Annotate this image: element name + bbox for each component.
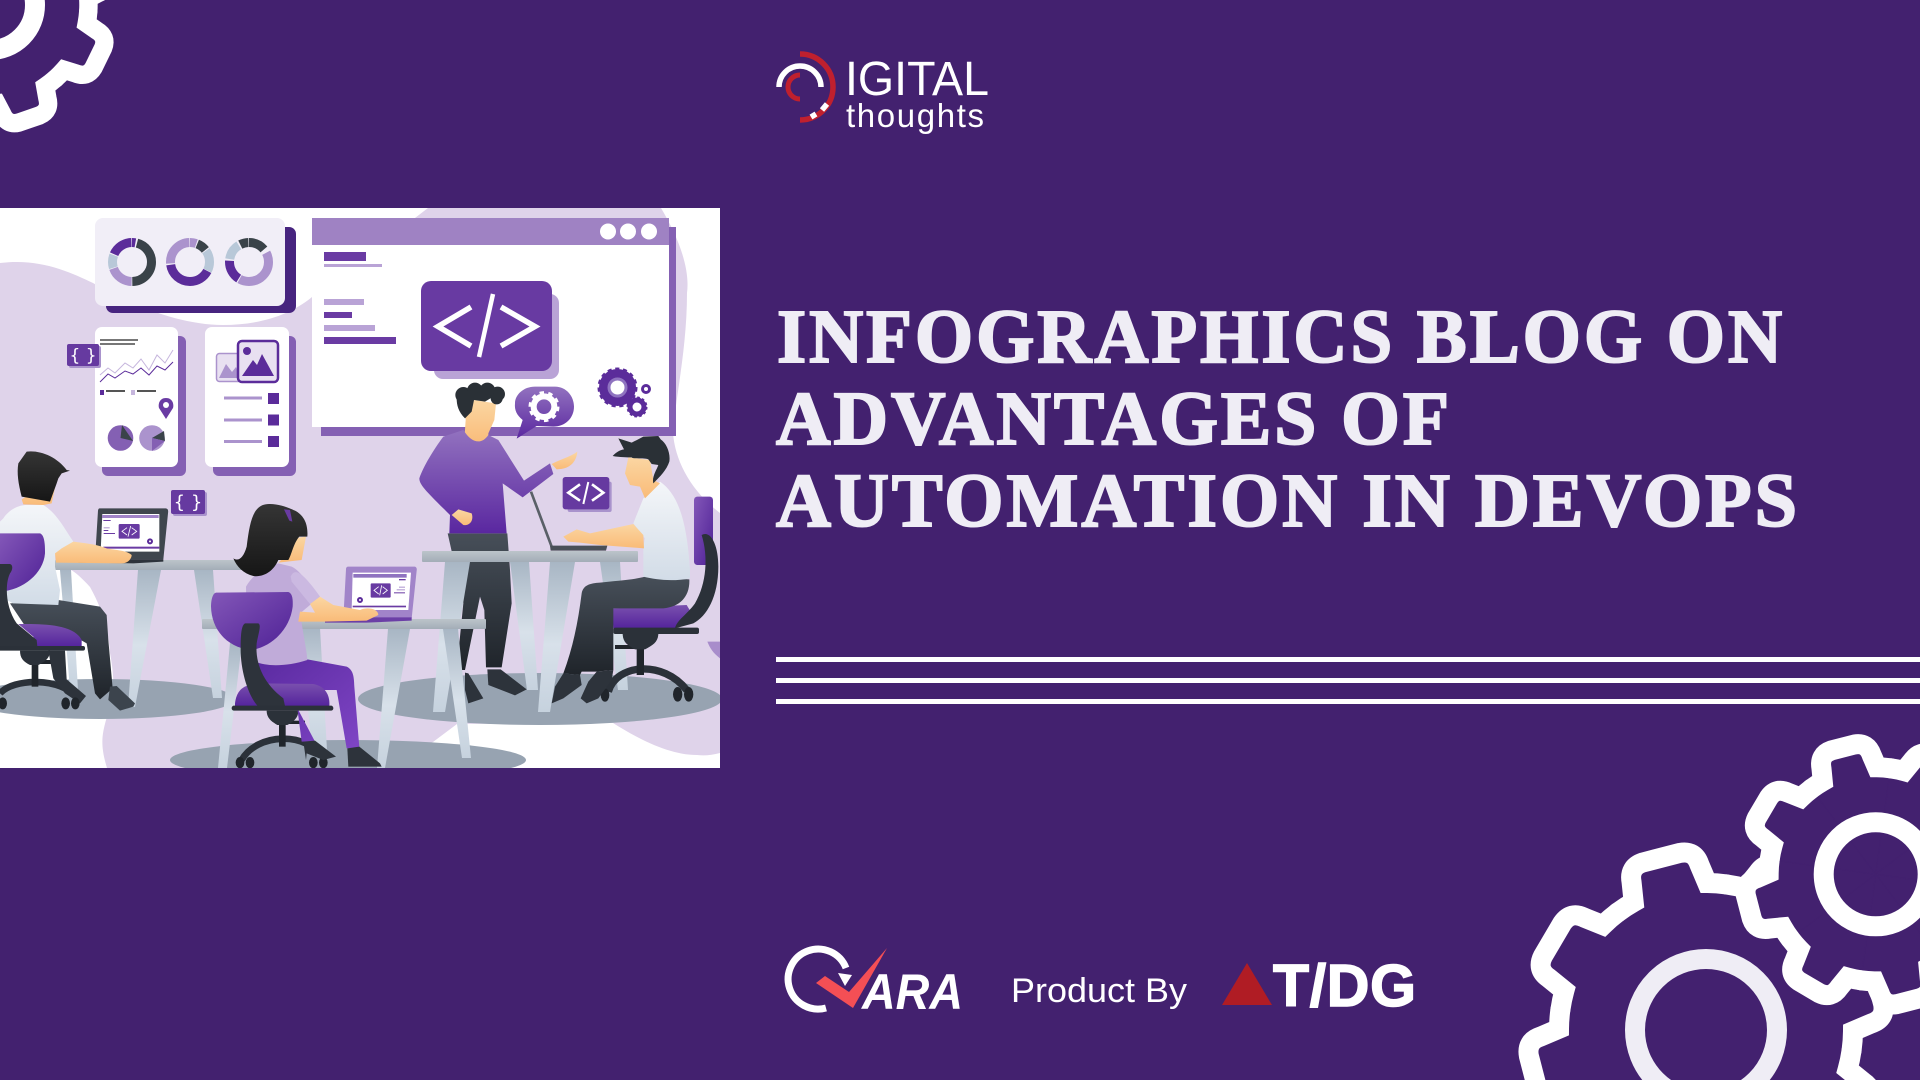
text: Product By: Product By	[1011, 972, 1187, 1010]
title: ADVANTAGES OF	[776, 377, 1452, 461]
logo: Digital Thoughts: thoughts	[846, 97, 984, 134]
pants	[10, 600, 113, 699]
laptop	[78, 508, 168, 563]
table: left desk	[55, 560, 245, 707]
person: seated woman	[211, 504, 417, 768]
laptop	[531, 492, 552, 547]
chair back	[211, 592, 293, 650]
icon: code tag badge right	[563, 477, 612, 512]
hair	[613, 436, 670, 483]
icon: code tag	[421, 281, 559, 379]
icon: curly braces badge centre	[171, 490, 207, 516]
chair	[601, 497, 713, 702]
panel: browser window with code	[312, 218, 676, 436]
person: standing man	[419, 383, 577, 703]
logo: QARA	[788, 948, 963, 1020]
shirt	[633, 482, 690, 580]
person: seated man left	[0, 451, 168, 711]
face	[278, 537, 306, 563]
panel: donut charts	[95, 218, 296, 313]
icon: large gear bottom right	[1489, 813, 1920, 1080]
logo: QARA: ARA	[860, 964, 963, 1020]
shirt	[0, 505, 73, 605]
logo: T/DG: T/DG	[1273, 953, 1416, 1019]
icon: small picture	[216, 354, 244, 382]
seat	[235, 683, 329, 706]
icon: window gears	[600, 370, 650, 416]
title	[776, 295, 1800, 543]
hair	[233, 504, 307, 576]
icon: curly braces badge left: { }	[69, 346, 97, 366]
speech bubble with gear	[515, 387, 574, 439]
panel: line chart card	[95, 327, 186, 476]
icon: curly braces badge left	[67, 344, 101, 368]
arm	[55, 542, 132, 563]
lavender background blob	[0, 208, 720, 768]
title: AUTOMATION IN DEVOPS	[776, 459, 1800, 543]
far leg and shoes	[48, 651, 86, 703]
logo: Digital Thoughts	[779, 53, 989, 134]
legs	[563, 577, 689, 675]
icon: top-left gear	[0, 0, 114, 132]
neck	[22, 487, 56, 505]
pants	[255, 659, 359, 748]
table: right desk	[422, 551, 638, 712]
table: centre desk	[202, 619, 486, 768]
icon: large picture	[238, 341, 278, 382]
panel: image card	[205, 327, 296, 476]
icon: map pin	[159, 398, 173, 419]
arm	[563, 524, 644, 548]
chair base	[0, 678, 64, 696]
pie charts	[108, 425, 133, 451]
shoes	[347, 747, 382, 767]
logo: Digital Thoughts: IGITAL	[845, 53, 989, 106]
title: INFOGRAPHICS BLOG ON	[777, 295, 1785, 379]
icon: upper gear bottom right	[1716, 715, 1920, 1034]
hair	[18, 451, 70, 502]
person: seated man right	[531, 436, 720, 703]
icon: curly braces badge centre: { }	[174, 492, 202, 513]
arm	[298, 597, 378, 622]
chair back	[0, 533, 45, 592]
head	[625, 457, 660, 498]
shirt	[246, 563, 320, 665]
chair base	[242, 739, 325, 760]
floor shadows	[0, 673, 720, 768]
divider lines	[776, 657, 1920, 704]
illustration: team working on code	[0, 208, 722, 780]
chair arm and seat bar	[675, 534, 718, 628]
seat	[18, 624, 82, 647]
laptop	[325, 567, 417, 623]
leaf	[707, 642, 720, 658]
